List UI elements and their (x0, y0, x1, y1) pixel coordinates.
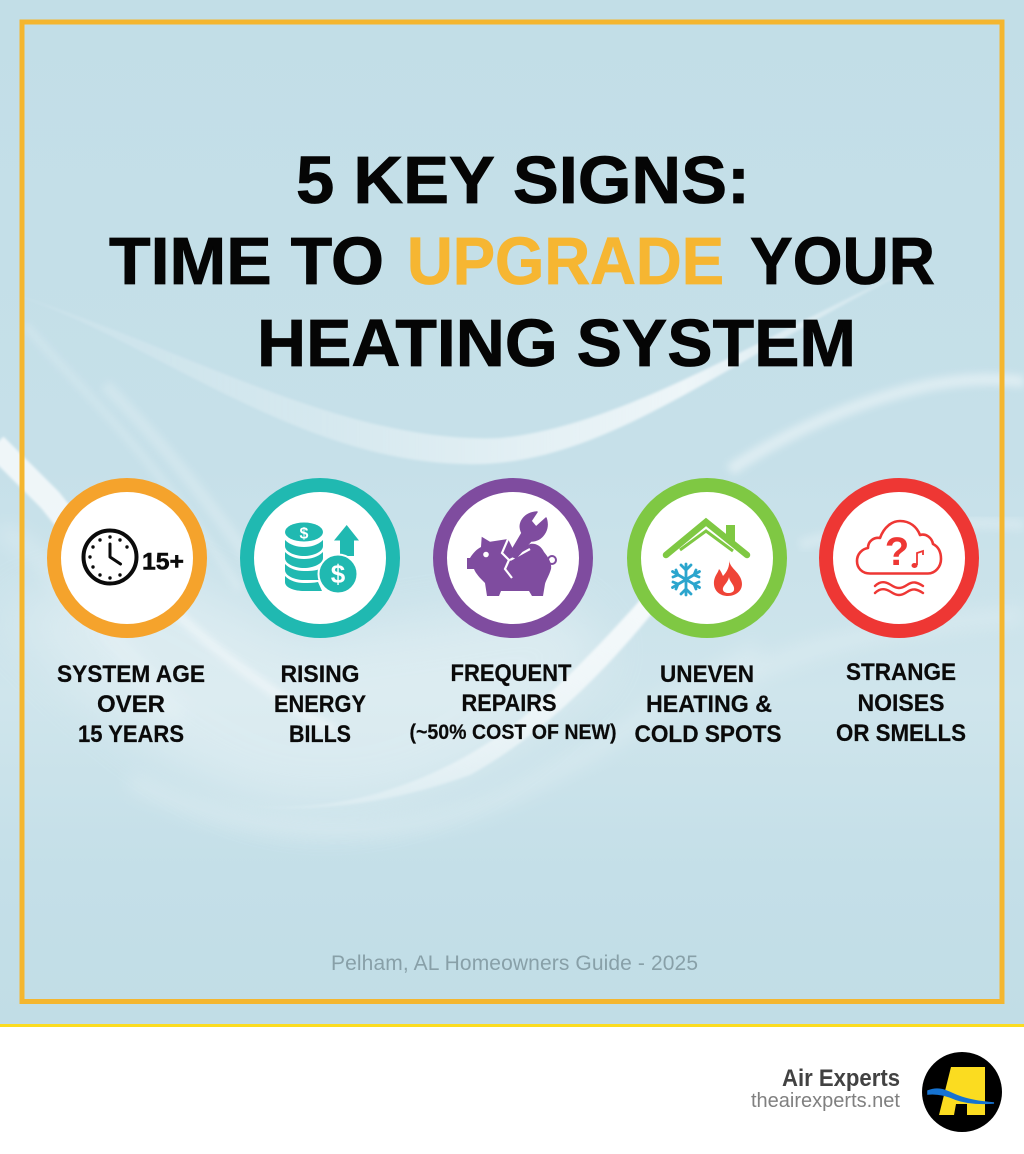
icon: cloud, question mark, music note, waves (857, 521, 941, 595)
label: uneven heating: UNEVEN (660, 661, 754, 688)
label: frequent repairs (410, 660, 616, 744)
icon: clock 15+: 15+ (142, 548, 184, 576)
label: rising energy bills (274, 661, 366, 748)
icon: coins and arrow: $ (331, 559, 346, 589)
logo (922, 1052, 1002, 1132)
label: frequent repairs: (~50% COST OF NEW) (410, 721, 616, 744)
label: rising energy bills: RISING (280, 661, 360, 688)
title (109, 143, 935, 381)
footer brand text: theairexperts.net (751, 1090, 900, 1112)
icon: house with snowflake and flame (666, 522, 747, 596)
icon: cloud, question mark, music note, waves: ? (885, 530, 909, 574)
panel: rising energy bills (247, 485, 393, 748)
label: strange noises: NOISES (858, 690, 944, 717)
title: YOUR (750, 224, 935, 299)
panel: strange noises (826, 485, 972, 747)
label: system age: 15 YEARS (78, 721, 184, 748)
title: UPGRADE (407, 224, 724, 299)
panel: frequent repairs (410, 485, 616, 744)
label: system age (57, 661, 205, 748)
label: frequent repairs: REPAIRS (462, 690, 556, 717)
title: TIME TO (109, 224, 384, 299)
label: system age: OVER (97, 691, 165, 718)
icon: cracked piggy bank with wrench (467, 512, 556, 596)
label: uneven heating: COLD SPOTS (634, 721, 782, 748)
label: uneven heating: HEATING & (646, 691, 772, 718)
panel: system age (54, 485, 205, 748)
title: HEATING SYSTEM (257, 306, 856, 381)
icon: coins and arrow (285, 522, 359, 594)
label: system age: SYSTEM AGE (57, 661, 205, 688)
footer brand text (751, 1065, 900, 1112)
icon: clock 15+ (84, 530, 184, 584)
footer brand text: Air Experts (782, 1065, 900, 1092)
icon: coins and arrow: $ (300, 526, 309, 542)
label: strange noises: STRANGE (846, 659, 956, 686)
panel: uneven heating (634, 485, 782, 748)
footer band (0, 1024, 1024, 1154)
label: rising energy bills: ENERGY (274, 691, 366, 718)
label: uneven heating (634, 661, 782, 748)
label: strange noises (836, 659, 966, 747)
label: strange noises: OR SMELLS (836, 720, 966, 747)
title: 5 KEY SIGNS: (296, 143, 750, 218)
caption: Pelham, AL Homeowners Guide - 2025 (331, 952, 698, 975)
label: frequent repairs: FREQUENT (450, 660, 572, 687)
label: rising energy bills: BILLS (289, 721, 351, 748)
